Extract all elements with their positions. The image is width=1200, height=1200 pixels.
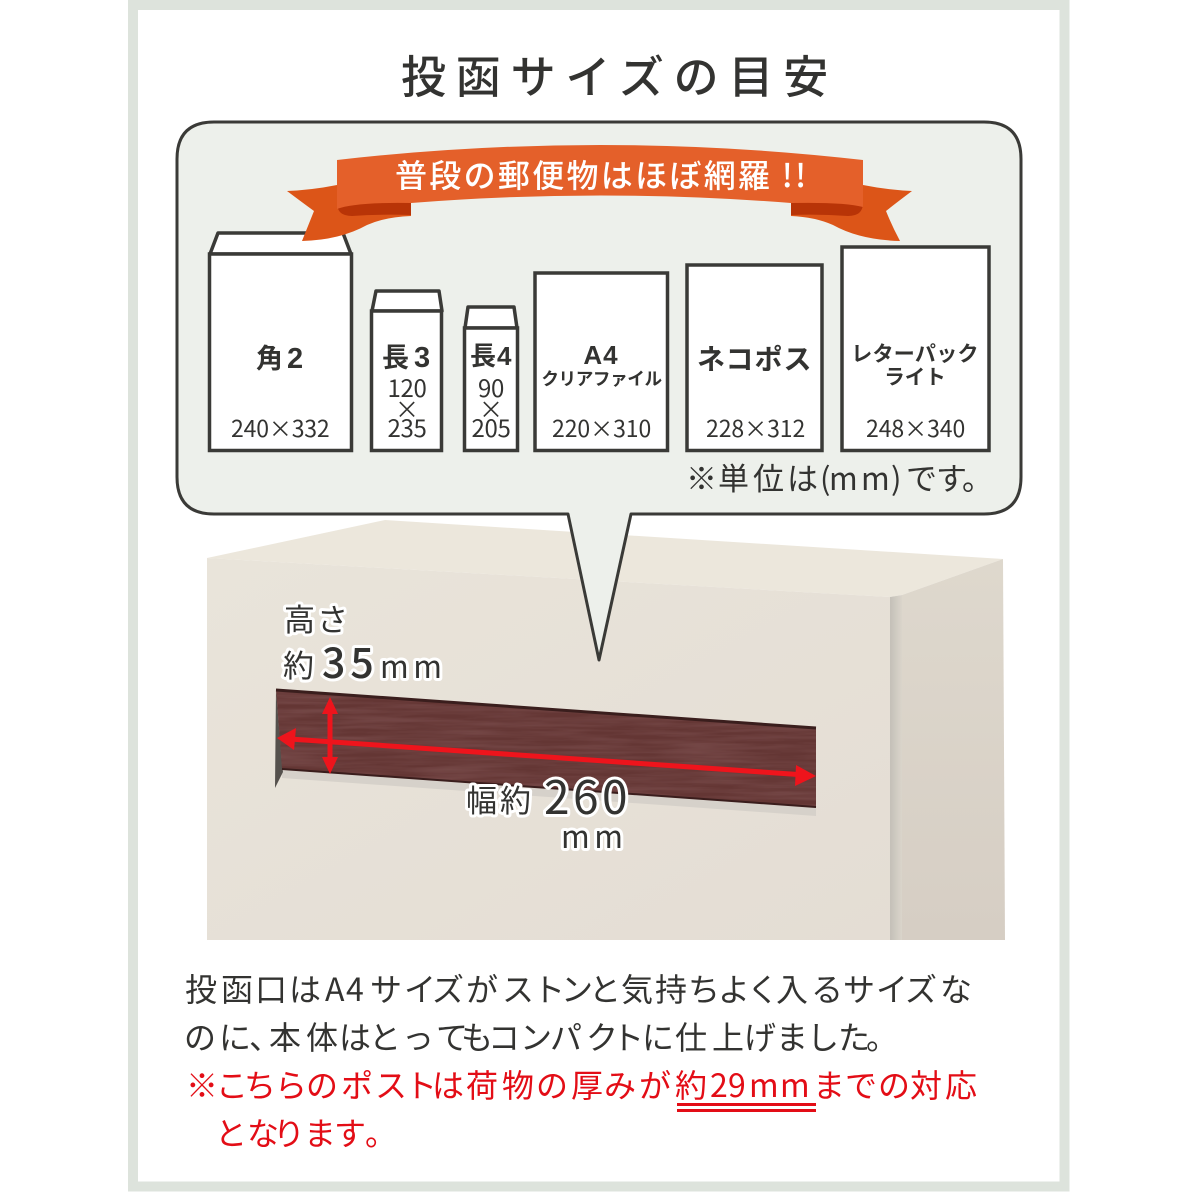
title: 投函サイズの目安 — [401, 41, 838, 106]
size box: レターパックライト: レターパック — [851, 338, 979, 368]
envelope: 長4: × — [479, 390, 503, 425]
size box: レターパックライト — [842, 247, 989, 450]
red notice: となります。 — [215, 1109, 397, 1155]
slot shadow and lip — [282, 769, 816, 816]
photo: post box with slot — [207, 520, 1005, 940]
ribbon banner — [287, 145, 912, 241]
label: slot width: mm — [561, 812, 627, 857]
envelope: 角2: 角 — [256, 337, 286, 376]
clear file: A4: 220×310 — [552, 410, 651, 444]
envelope: 長4: 長 — [470, 336, 496, 373]
label: slot height: 約 — [283, 641, 314, 686]
clear file: A4 — [535, 273, 668, 450]
box top face — [207, 520, 1003, 597]
envelope: 長3 — [372, 291, 442, 450]
label: slot height: mm — [380, 642, 446, 687]
ribbon text: 普段の郵便物はほぼ網羅 !! — [395, 151, 808, 197]
envelope: 長4 — [464, 307, 518, 450]
body text — [184, 965, 972, 1059]
red notice — [186, 1061, 977, 1155]
speech bubble panel — [177, 122, 1021, 660]
ribbon right tail — [791, 185, 912, 241]
size box: ネコポス — [687, 265, 822, 450]
page frame — [133, 5, 1064, 1186]
ribbon folds — [337, 198, 411, 216]
red notice: ※こちらのポストは荷物の厚みが約29mmまでの対応 — [186, 1061, 977, 1107]
box edge strip — [890, 595, 902, 940]
label: slot width: 260 — [544, 762, 631, 828]
envelope: 角2 — [210, 233, 352, 450]
height arrow — [322, 697, 338, 774]
envelope: 長3: × — [395, 390, 419, 425]
label: slot width: 幅約 — [466, 776, 534, 821]
label: slot height: 35 — [322, 630, 379, 690]
envelope: 長3: 235 — [387, 409, 427, 444]
label: slot height — [283, 595, 446, 690]
size box: レターパックライト: 248×340 — [866, 410, 965, 444]
wood flap — [270, 685, 820, 810]
ribbon left tail — [287, 185, 411, 241]
body text: のに、本体はとってもコンパクトに仕上げました。 — [184, 1013, 898, 1059]
label: slot height: 高さ — [284, 595, 350, 640]
box front face — [207, 558, 890, 940]
size box: レターパックライト: ライト — [884, 360, 946, 390]
size box: ネコポス: 228×312 — [706, 410, 805, 444]
envelope: 長3: 3 — [414, 342, 430, 374]
envelope: 長4: 4 — [497, 341, 512, 371]
width arrow — [277, 728, 816, 786]
clear file: A4: クリアファイル — [541, 366, 662, 391]
body text: 投函口はA4サイズがストンと気持ちよく入るサイズな — [185, 965, 972, 1011]
double underline — [677, 1103, 816, 1112]
envelope: 長3: 長 — [382, 336, 412, 375]
clear file: A4: A4 — [583, 340, 619, 370]
unit note: ※単位は(mm)です。 — [686, 454, 993, 499]
envelope: 長4: 90 — [478, 369, 504, 404]
envelope: 長4: 205 — [471, 409, 511, 444]
box side face — [902, 559, 1005, 940]
envelope: 角2: 240×332 — [231, 410, 330, 444]
envelope: 長3: 120 — [387, 369, 427, 404]
label: slot width — [466, 762, 631, 857]
envelope: 角2: 2 — [287, 343, 303, 375]
ribbon band — [337, 145, 863, 209]
size box: ネコポス: ネコポス — [697, 338, 812, 378]
